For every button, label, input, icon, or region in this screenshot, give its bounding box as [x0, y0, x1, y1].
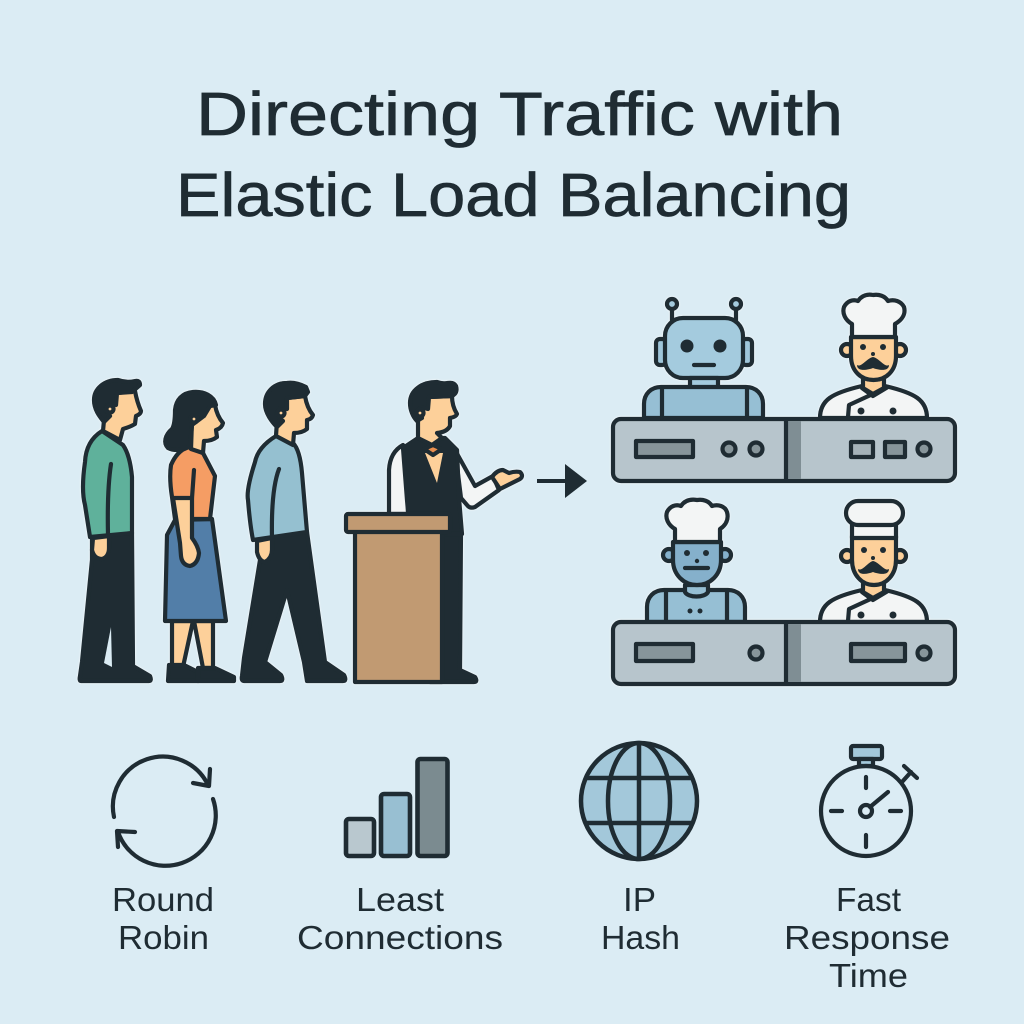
icon: bar chart	[346, 759, 448, 856]
title: Elastic Load Balancing	[176, 161, 851, 229]
label: round robin: Round	[112, 881, 214, 918]
person: woman in orange top and blue skirt	[165, 392, 234, 681]
label: round robin: Robin	[118, 919, 209, 956]
strategy: round robin	[112, 757, 216, 956]
chef with mustache	[820, 295, 927, 418]
robot server worker	[644, 299, 763, 418]
bottom server row	[613, 500, 955, 684]
chef with tall toque	[820, 501, 927, 622]
label: least connections	[297, 881, 503, 956]
top server row	[613, 295, 955, 481]
label: fast response time: Fast	[836, 881, 901, 918]
strategy: fast response time	[784, 746, 950, 994]
arrow pointing to servers	[537, 464, 587, 498]
strategy: ip hash	[581, 743, 697, 956]
maitre d' host at podium	[346, 382, 522, 682]
icon: stopwatch	[821, 746, 917, 856]
label: ip hash: Hash	[601, 919, 680, 956]
label: fast response time	[784, 881, 950, 994]
label: fast response time: Time	[829, 957, 908, 994]
title: Directing Traffic with	[196, 80, 843, 148]
host torso and vest	[389, 438, 499, 534]
label: ip hash	[601, 881, 680, 956]
podium	[346, 514, 450, 682]
host bow tie	[424, 445, 442, 455]
icon: globe	[581, 743, 697, 859]
server unit bottom	[613, 622, 955, 684]
label: ip hash: IP	[623, 881, 656, 918]
title	[176, 80, 851, 229]
server unit top	[613, 419, 955, 481]
label: least connections: Connections	[297, 919, 503, 956]
person: man in green shirt	[80, 380, 151, 681]
strategy: least connections	[297, 759, 503, 956]
label: round robin	[112, 881, 214, 956]
icon: circular arrows	[113, 757, 216, 866]
person: man in blue shirt	[242, 383, 345, 681]
label: fast response time: Response	[784, 919, 950, 956]
queue of customers	[80, 380, 345, 681]
label: least connections: Least	[356, 881, 444, 918]
host hand	[492, 470, 522, 489]
host trousers	[430, 530, 476, 682]
host head	[410, 382, 457, 445]
robot chef	[647, 500, 745, 622]
